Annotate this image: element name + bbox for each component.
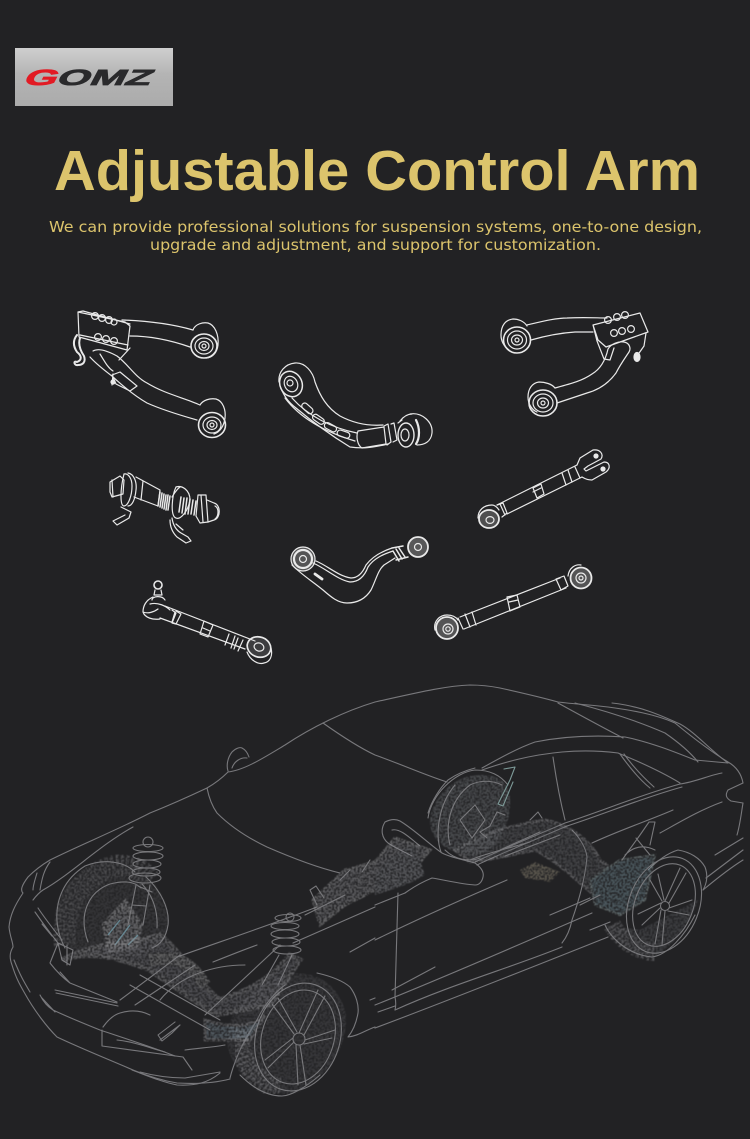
steering and centre driveline <box>305 838 430 925</box>
subtitle: upgrade and adjustment, and support for customization. <box>150 236 601 254</box>
car body outline <box>9 685 743 1085</box>
control arm: straight link <box>435 565 592 639</box>
subtitle <box>49 218 702 254</box>
subtitle: We can provide professional solutions for suspension systems, one-to-one design, <box>49 218 702 236</box>
control arm: upper right A-arm <box>501 312 648 416</box>
control arm: curved centre arm <box>276 363 432 448</box>
control arm: camber bolt <box>110 473 219 543</box>
control arm: rear curved link <box>291 537 428 603</box>
control arm: fork end rod <box>478 450 609 528</box>
control arm: ball joint rod <box>143 581 274 663</box>
far front wheel <box>428 767 515 860</box>
car wireframe <box>9 685 743 1102</box>
front suspension and subframe <box>62 935 300 1041</box>
title: Adjustable Control Arm <box>54 139 700 203</box>
logo wordmark: GOMZ <box>20 65 159 90</box>
rear wheel <box>605 846 715 964</box>
rear axle and rear suspension <box>455 812 655 915</box>
logo badge <box>15 48 173 106</box>
front right strut and spring <box>262 913 301 985</box>
front left strut and spring <box>128 837 163 925</box>
control arm: upper left A-arm <box>74 311 226 438</box>
front right wheel <box>227 972 355 1102</box>
front left wheel <box>55 862 168 958</box>
